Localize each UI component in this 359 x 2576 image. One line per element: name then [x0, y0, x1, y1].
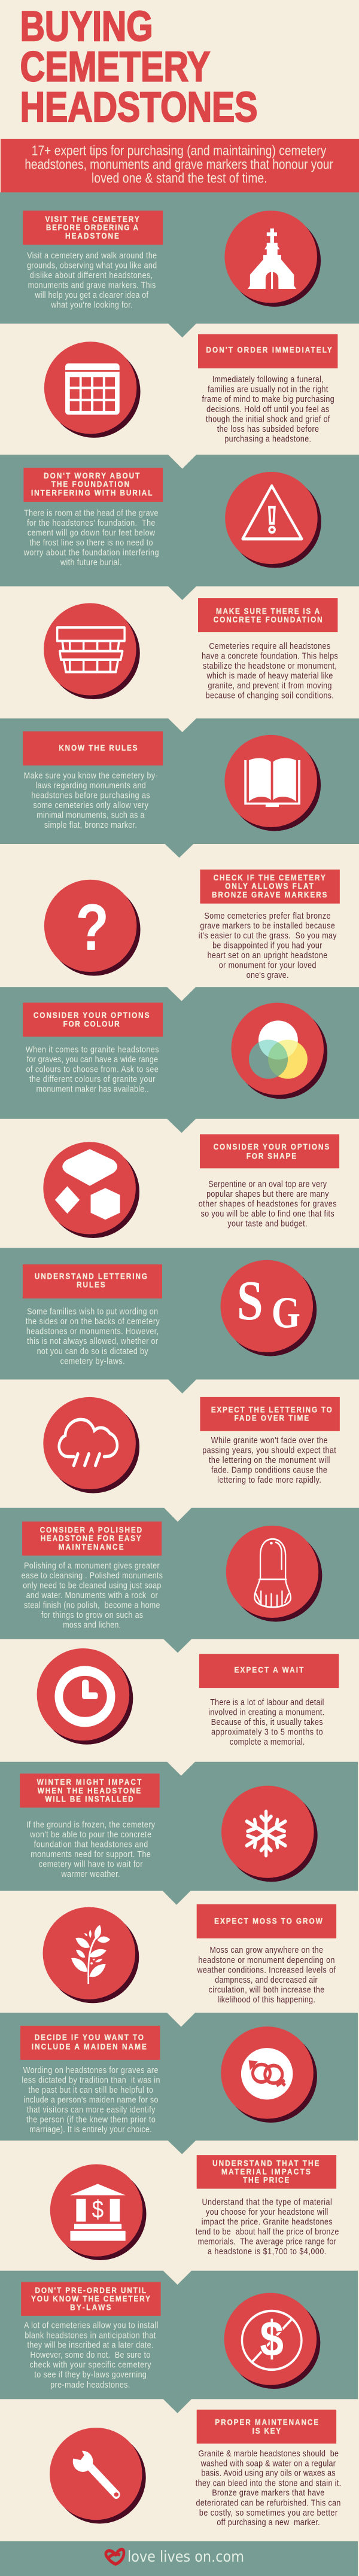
heading	[198, 334, 337, 368]
heading	[23, 211, 163, 245]
body text: complete a memorial.	[230, 1736, 305, 1746]
body text: the sides or on the backs of cemetery	[26, 1316, 160, 1326]
title: CEMETERY	[20, 42, 210, 90]
body text: some cemeteries only allow very	[33, 800, 148, 810]
icon: plant	[43, 1907, 139, 2003]
icon: question mark: ?	[75, 891, 109, 964]
body text	[208, 1697, 324, 1746]
panel: pre-order	[21, 2282, 320, 2389]
heading: DECIDE IF YOU WANT TO	[35, 2032, 144, 2042]
body text: Polishing of a monument gives greater	[24, 1560, 160, 1571]
heading	[197, 2410, 336, 2444]
heading: CONSIDER YOUR OPTIONS	[34, 1010, 150, 1020]
body text: Cemeteries require all headstones	[209, 641, 330, 651]
body text: involved in creating a monument.	[208, 1706, 324, 1717]
icon: clock	[37, 1648, 133, 1745]
title	[20, 2, 257, 130]
body text: dislike about different headstones,	[30, 270, 153, 280]
icon: warning triangle	[225, 472, 321, 568]
body text: for things to grow on such as	[41, 1609, 143, 1620]
heading: YOU KNOW THE CEMETERY	[31, 2294, 150, 2303]
heading	[197, 2155, 336, 2189]
heading: INTERFERING WITH BURIAL	[31, 487, 152, 498]
body text: likelihood of this happening.	[218, 1994, 315, 2004]
body text: one's grave.	[247, 970, 289, 980]
body text: approximately 3 to 5 months to	[211, 1727, 323, 1737]
body text: won't be able to pour the concrete	[29, 1829, 151, 1839]
body text: monuments need for support. The	[31, 1849, 151, 1859]
body text	[202, 1435, 336, 1484]
body text: foundation that headstones and	[34, 1839, 148, 1849]
icon: calendar	[44, 342, 141, 438]
body text: basis. Avoid using any oils or waxes as	[201, 2468, 336, 2478]
icon: colour venn	[231, 1002, 327, 1099]
body text: Moss can grow anywhere on the	[210, 1944, 323, 1955]
heading: WINTER MIGHT IMPACT	[37, 1777, 141, 1787]
body text: with future burial.	[60, 557, 122, 567]
body text: marriage). It is entirely your choice.	[29, 2124, 152, 2134]
body text: families are usually not in the right	[208, 384, 328, 394]
body text: though the initial shock and grief of	[206, 413, 330, 424]
body text: A lot of cemeteries allow you to install	[24, 2321, 158, 2330]
panel: lettering rules	[23, 1260, 317, 1366]
body text: include a person's maiden name for so	[23, 2094, 159, 2105]
body text: you choose for your headstone will	[206, 2207, 328, 2217]
band: teal section 13	[0, 1762, 358, 1905]
body text	[202, 374, 334, 444]
body text: a headstone is $1,700 to $4,000.	[208, 2246, 326, 2256]
icon: serif letters: S	[237, 1269, 263, 1332]
band: footer	[0, 2541, 358, 2576]
body text: for graves, you can have a wide range	[27, 1054, 158, 1064]
body text	[24, 770, 158, 830]
icon: brush	[226, 1526, 322, 1621]
icon: question mark	[44, 880, 141, 975]
body text: Serpentine or an oval top are very	[208, 1178, 327, 1189]
body text: headstones or monuments. However,	[26, 1326, 159, 1336]
heading: DON'T ORDER IMMEDIATELY	[206, 345, 332, 355]
body text	[26, 1819, 155, 1879]
body text: headstone or monument depending on	[198, 1955, 334, 1965]
panel: don't order immediately	[44, 334, 337, 444]
body text: There is a lot of labour and detail	[210, 1697, 324, 1707]
body text: Some cemeteries prefer flat bronze	[204, 910, 331, 920]
icon: male and female symbols	[221, 2026, 317, 2123]
body text: stabilize the headstone or monument,	[203, 660, 337, 670]
body text: steal finish (no polish, become a home	[24, 1599, 160, 1610]
body text: fade. Damp conditions cause the	[211, 1464, 327, 1475]
body text	[26, 1306, 160, 1366]
subtitle: 17+ expert tips for purchasing (and maintaining) cemetery	[32, 144, 327, 158]
body text	[27, 250, 157, 310]
heading: BEFORE ORDERING A	[46, 222, 139, 232]
band: teal section 11	[0, 1508, 359, 1653]
icon: rain cloud	[43, 1397, 139, 1493]
body text	[22, 2065, 160, 2134]
body text: popular shapes but there are many	[206, 1188, 329, 1199]
body text: Immediately following a funeral,	[212, 374, 324, 384]
body text: While granite won't fade over the	[211, 1435, 328, 1445]
body text: check with your specific cemetery	[29, 2360, 151, 2370]
heading: FADE OVER TIME	[234, 1413, 309, 1423]
body text: impact the price. Granite headstones	[202, 2217, 333, 2227]
heading	[199, 1654, 339, 1688]
body text	[199, 910, 337, 980]
body text: because of changing soil conditions.	[206, 690, 334, 700]
body text: which is made of heavy material like	[206, 670, 333, 681]
body text: ease to cleansing . Polished monuments	[22, 1570, 163, 1580]
body text: Granite & marble headstones should be	[198, 2449, 339, 2458]
heading: THE FOUNDATION	[51, 479, 129, 489]
body text: off purchasing a new marker.	[217, 2517, 320, 2527]
icon: foundation bricks	[44, 603, 140, 699]
body text: your taste and budget.	[227, 1218, 308, 1228]
body text: monuments and grave markers. This	[28, 280, 156, 290]
body text: tend to be about half the price of bronze	[196, 2227, 339, 2236]
body text: moss and lichen.	[63, 1619, 121, 1630]
heading: DON'T WORRY ABOUT	[44, 471, 139, 480]
heading: UNDERSTAND LETTERING	[35, 1271, 147, 1281]
heading: FOR COLOUR	[63, 1019, 120, 1029]
body text: other shapes of headstones for graves	[199, 1199, 337, 1209]
heading: UNDERSTAND THAT THE	[212, 2159, 320, 2168]
body text: Understand that the type of material	[202, 2197, 332, 2207]
body text: decisions. Hold off until you feel as	[206, 404, 329, 414]
band: teal section 9	[0, 1248, 359, 1394]
panel: options for shape	[43, 1134, 339, 1238]
body text: monument maker has available..	[36, 1084, 149, 1094]
icon: serif letters: G	[272, 1288, 300, 1337]
subtitle: headstones, monuments and grave markers that honour your	[25, 157, 333, 172]
heading: DON'T PRE-ORDER UNTIL	[35, 2285, 146, 2295]
band: teal section 1	[0, 193, 359, 337]
body text: There is room at the head of the grave	[24, 507, 159, 518]
heading: RULES	[77, 1280, 105, 1289]
body text: the different colours of granite your	[29, 1074, 156, 1084]
body text: simple flat, bronze marker.	[44, 819, 137, 830]
panel: foundation interfering with burial	[23, 468, 321, 568]
heading: FOR SHAPE	[247, 1151, 296, 1161]
body text: cement will go down four feet below	[28, 527, 156, 538]
body text: or monument for your loved	[219, 959, 316, 970]
body text: for the headstones' foundation. The	[27, 517, 156, 528]
body text: heart set on an upright headstone	[208, 950, 327, 960]
body text: dampness, and decreased air	[215, 1974, 318, 1984]
heading	[198, 598, 337, 632]
body text: the frost line so there is no need to	[29, 537, 153, 547]
heading: THE PRICE	[243, 2175, 290, 2185]
footer logo	[106, 2549, 124, 2564]
heading	[23, 468, 163, 502]
panel: visit the cemetery	[23, 211, 321, 310]
heading	[21, 2282, 161, 2316]
body text: the loss has subsided before	[217, 423, 319, 434]
panel: flat bronze markers	[44, 870, 340, 980]
body text: will help you get a clearer idea of	[35, 289, 148, 300]
panel: maiden name	[20, 2026, 317, 2134]
heading: VISIT THE CEMETERY	[45, 214, 139, 224]
panel: options for colour	[23, 1002, 327, 1099]
icon: snowflake	[221, 1786, 318, 1882]
body text	[199, 1178, 337, 1228]
panel: lettering fades	[43, 1397, 340, 1493]
heading: CONSIDER YOUR OPTIONS	[214, 1142, 329, 1151]
heading	[197, 1904, 336, 1938]
body text	[197, 1944, 336, 2004]
heading: MAKE SURE THERE IS A	[216, 606, 320, 616]
body text: circulation, will both increase the	[209, 1984, 324, 1995]
body text: weather conditions. Increased levels of	[197, 1964, 336, 1975]
icon: serif letters	[220, 1260, 317, 1356]
heading: KNOW THE RULES	[59, 743, 138, 752]
icon: no dollar	[224, 2293, 320, 2389]
body text: washed with soap & water on a regular	[200, 2459, 336, 2468]
body text	[196, 2449, 341, 2527]
body text	[22, 1560, 163, 1630]
body text: Wording on headstones for graves are	[23, 2065, 159, 2075]
footer text: love lives on.com	[127, 2548, 244, 2565]
body text: to see if they by-laws governing	[34, 2370, 147, 2379]
body text	[24, 2321, 158, 2389]
icon: bank with dollar	[50, 2164, 147, 2260]
body text	[196, 2197, 339, 2256]
heading: CONCRETE FOUNDATION	[214, 614, 323, 624]
body text: pre-made headstones.	[50, 2380, 130, 2389]
subtitle: loved one & stand the test of time.	[92, 171, 267, 186]
heading	[200, 1397, 340, 1431]
body text: frame of mind to make big purchasing	[202, 394, 334, 404]
subtitle	[25, 144, 333, 186]
body text: they can bleed into the stone and stain it.	[196, 2478, 341, 2488]
body text: Visit a cemetery and walk around the	[27, 250, 157, 260]
body text: However, some do not. Be sure to	[31, 2350, 151, 2359]
body text: be costly, so sometimes you are better	[199, 2508, 337, 2517]
body text: Because of this, it usually takes	[211, 1717, 323, 1727]
body text: Some families wish to put wording on	[27, 1306, 158, 1316]
body text: purchasing a headstone.	[224, 433, 311, 444]
heading: CHECK IF THE CEMETERY	[214, 873, 325, 882]
panel: polished headstone	[22, 1522, 322, 1630]
body text: lettering to fade more rapidly.	[217, 1474, 321, 1484]
body text: only need to be cleaned using just soap	[23, 1580, 162, 1590]
body text: granite, and prevent it from moving	[208, 680, 331, 690]
body text: be disappointed if you had your	[212, 940, 323, 950]
body text: the person (if the knew them prior to	[26, 2114, 156, 2124]
body text: so you will be able to find one that fits	[201, 1208, 334, 1218]
body text: If the ground is frozen, the cemetery	[26, 1819, 155, 1830]
heading: CONSIDER A POLISHED	[40, 1525, 142, 1535]
body text: the lettering on the monument will	[209, 1455, 330, 1465]
band: teal section 15	[0, 2013, 358, 2154]
body text: have a concrete foundation. This helps	[202, 650, 338, 661]
body text: that visitors can more easily identify	[27, 2104, 156, 2114]
icon: headstone shapes	[43, 1142, 139, 1238]
heading	[23, 731, 163, 766]
body text: the past but it can still be helpful to	[28, 2084, 153, 2095]
heading	[200, 870, 340, 904]
icon: church	[224, 211, 321, 307]
body text: Bronze grave markers that have	[212, 2488, 324, 2498]
body text	[23, 507, 159, 567]
body text	[202, 641, 338, 700]
body text: memorials. The average price range for	[198, 2236, 336, 2246]
heading	[23, 1264, 162, 1298]
panel: material impacts price	[50, 2155, 339, 2260]
heading: WHEN THE HEADSTONE	[38, 1785, 141, 1795]
body text: minimal monuments, such as a	[36, 809, 145, 820]
body text: blank headstones in anticipation that	[25, 2330, 156, 2340]
body text: Make sure you know the cemetery by-	[24, 770, 158, 781]
panel: proper maintenance	[50, 2410, 341, 2527]
body text: worry about the foundation interfering	[23, 547, 159, 557]
heading: HEADSTONE FOR EASY	[41, 1533, 141, 1543]
heading	[200, 1134, 339, 1168]
heading: EXPECT THE LETTERING TO	[211, 1405, 332, 1414]
body text: passing years, you should expect that	[202, 1444, 336, 1455]
body text: laws regarding monuments and	[35, 780, 146, 790]
heading: HEADSTONE	[65, 231, 119, 240]
panel: concrete foundation	[44, 598, 338, 700]
icon: heart	[106, 2549, 124, 2564]
band: teal section 7	[0, 987, 359, 1133]
heading: IS KEY	[252, 2426, 281, 2435]
body text: and water. Monuments with a rock or	[26, 1590, 158, 1600]
heading: PROPER MAINTENANCE	[215, 2418, 319, 2427]
body text: warmer weather.	[61, 1868, 120, 1879]
body text: grave markers to be installed because	[200, 920, 335, 931]
title: BUYING	[20, 2, 153, 50]
heading: MAINTENANCE	[59, 1542, 124, 1551]
panel: moss	[43, 1904, 336, 2004]
heading	[22, 1522, 162, 1556]
body text: of colours to choose from. Ask to see	[26, 1064, 159, 1074]
icon: open book	[224, 735, 321, 831]
heading	[23, 1002, 163, 1037]
title: HEADSTONES	[20, 83, 257, 130]
heading: WILL BE INSTALLED	[45, 1794, 133, 1804]
band: teal section 5	[0, 718, 359, 858]
panel: expect a wait	[37, 1648, 339, 1746]
panel: winter	[20, 1773, 318, 1882]
body text: they will be inscribed at a later date.	[28, 2340, 153, 2350]
body text: deteriorated can be refurbished. This can	[196, 2498, 340, 2508]
heading: BY-LAWS	[70, 2302, 111, 2312]
body text: this is not always allowed, whether or	[27, 1336, 158, 1346]
band: subtitle strip	[1, 139, 359, 193]
band: teal section 17	[0, 2271, 358, 2413]
heading	[20, 2026, 160, 2060]
heading: INCLUDE A MAIDEN NAME	[32, 2041, 147, 2051]
heading	[20, 1773, 160, 1807]
heading: EXPECT MOSS TO GROW	[214, 1916, 323, 1926]
heading: EXPECT A WAIT	[234, 1665, 303, 1675]
icon: wrench	[50, 2428, 146, 2524]
heading: BRONZE GRAVE MARKERS	[212, 890, 327, 900]
body text: less dictated by tradition than it was in	[22, 2074, 160, 2085]
body text: cemetery by-laws.	[60, 1355, 125, 1366]
band: teal section 3	[0, 455, 359, 600]
body text: headstones before purchasing as	[31, 789, 150, 800]
body text: cemetery will have to wait for	[39, 1858, 143, 1869]
icon: bank with dollar: $	[92, 2196, 104, 2224]
panel: know the rules	[23, 731, 321, 831]
body text: When it comes to granite headstones	[26, 1044, 159, 1054]
body text: what you're looking for.	[50, 300, 133, 310]
body text	[26, 1044, 159, 1094]
icon: no dollar: $	[260, 2312, 284, 2367]
body text: grounds, observing what you like and	[27, 260, 157, 270]
heading: MATERIAL IMPACTS	[221, 2167, 311, 2176]
heading: ONLY ALLOWS FLAT	[225, 881, 314, 891]
body text: not you can do so is dictated by	[37, 1346, 148, 1356]
body text: it's easier to cut the grass. So you may	[199, 930, 337, 940]
